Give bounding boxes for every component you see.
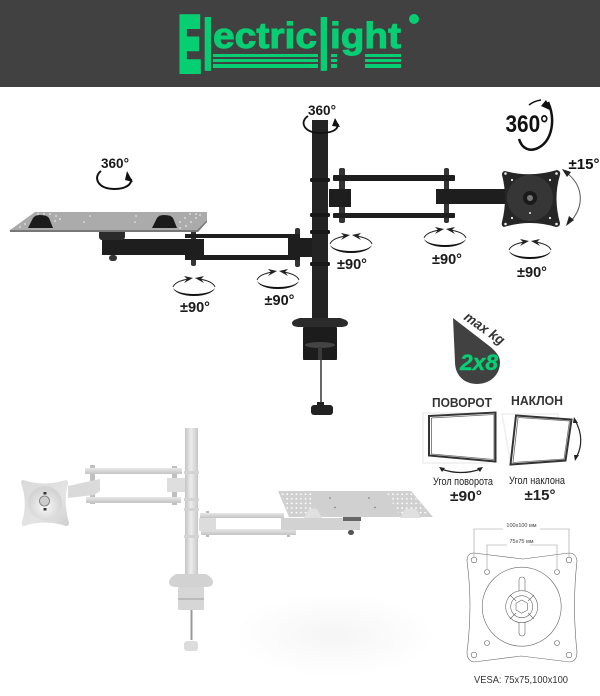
rotation label: 90 degrees 3: ±90°	[337, 256, 367, 273]
swivel diagram: ±90°	[450, 488, 482, 505]
tilt diagram: ±15°	[524, 487, 556, 504]
rotation label: 90 degrees 3	[330, 233, 372, 273]
VESA dimension labels	[506, 523, 537, 545]
rotation label: tilt 15	[562, 157, 600, 226]
rotation label: pole 360	[304, 102, 340, 133]
rotation label: 90 degrees 4: ±90°	[432, 251, 462, 268]
header band	[0, 0, 600, 87]
rotation label: pole 360: 360°	[308, 102, 336, 118]
rotation label: plate 360 large: 360°	[506, 111, 548, 138]
swivel diagram: ПОВОРОТ	[432, 396, 492, 410]
logo: Electriclight: l	[318, 5, 330, 88]
black VESA monitor plate	[502, 170, 560, 227]
max load badge: 2x8	[459, 350, 499, 375]
silver VESA monitor plate	[21, 480, 69, 526]
rotation label: platform 360	[97, 155, 133, 189]
swivel diagram	[423, 396, 496, 505]
rotation label: 90 degrees 2	[257, 269, 299, 309]
tilt diagram: НАКЛОН	[511, 394, 563, 408]
silver mount: pole and clamp	[169, 428, 213, 651]
logo: Electriclight: ight	[330, 15, 401, 56]
logo: Electriclight: E	[178, 1, 201, 88]
logo: Electriclight	[178, 1, 419, 88]
logo: Electriclight: l	[202, 5, 214, 88]
tilt diagram: Угол наклона	[509, 475, 566, 487]
VESA dimension labels: 75x75 мм	[509, 539, 534, 545]
silver laptop arm	[199, 511, 361, 537]
black monitor arm	[329, 168, 506, 223]
VESA caption: VESA: 75x75,100x100	[474, 674, 568, 686]
rotation label: 90 degrees 1: ±90°	[180, 299, 210, 316]
swivel diagram: Угол поворота	[433, 476, 494, 488]
logo: Electriclight: ectric	[213, 15, 317, 56]
rotation label: 90 degrees 2: ±90°	[264, 292, 294, 309]
rotation label: platform 360: 360°	[101, 155, 129, 171]
rotation label: 90 degrees 5	[509, 239, 551, 281]
black laptop arm	[99, 228, 312, 267]
rotation label: tilt 15: ±15°	[568, 157, 600, 173]
VESA drawing	[467, 529, 577, 662]
rotation label: 90 degrees 4	[424, 227, 466, 268]
silver laptop platform	[278, 491, 433, 518]
black mount: desk pole and clamp	[292, 120, 348, 415]
silver monitor arm	[68, 465, 185, 505]
tilt diagram	[502, 394, 581, 504]
VESA dimension labels: 100x100 мм	[506, 523, 537, 529]
floor shadow	[235, 593, 435, 677]
rotation label: 90 degrees 1	[173, 276, 215, 316]
black laptop platform	[10, 212, 207, 232]
rotation label: plate 360 large	[506, 100, 552, 150]
rotation label: 90 degrees 5: ±90°	[517, 264, 547, 281]
max load badge	[453, 308, 508, 384]
max load badge: max kg	[461, 308, 508, 348]
